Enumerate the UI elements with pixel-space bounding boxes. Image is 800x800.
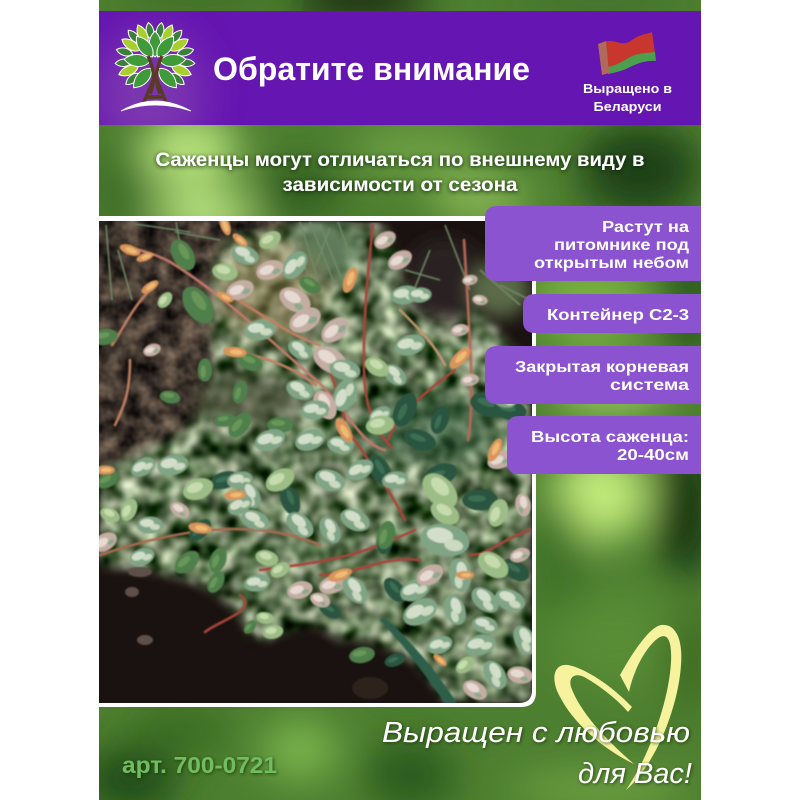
slogan: Выращен с любовью bbox=[382, 717, 690, 749]
info box: container bbox=[523, 294, 701, 333]
dark green leaves bbox=[185, 388, 533, 622]
info box: grown in open field: питомнике под bbox=[554, 237, 689, 254]
logo: tree bbox=[115, 22, 195, 111]
soil and grass masses bbox=[195, 220, 530, 465]
flag caption: Выращено в bbox=[583, 81, 672, 96]
slogan bbox=[382, 717, 692, 790]
subtitle bbox=[156, 150, 644, 196]
info box: closed root system: Закрытая корневая bbox=[515, 359, 689, 376]
subtitle: зависимости от сезона bbox=[282, 175, 518, 196]
info box: height: Высота саженца: bbox=[531, 429, 689, 446]
flag caption: Беларуси bbox=[594, 99, 662, 114]
upper leaves bbox=[91, 228, 528, 455]
icon: Belarus flag bbox=[598, 32, 656, 75]
info box: grown in open field: Растут на bbox=[602, 219, 689, 236]
flag caption bbox=[583, 81, 672, 114]
grass bbox=[106, 222, 530, 305]
foliage texture bbox=[99, 222, 532, 703]
middle and lower leaves bbox=[89, 434, 542, 704]
icon: yellow heart bbox=[554, 625, 681, 790]
photo: barberry shrub bbox=[85, 205, 542, 704]
logo ring of leaves bbox=[115, 22, 195, 92]
subtitle: Саженцы могут отличаться по внешнему виду в bbox=[156, 150, 644, 171]
info box: height bbox=[507, 416, 701, 474]
article number: арт. 700-0721 bbox=[122, 752, 277, 778]
soil specks bbox=[125, 567, 388, 699]
info box: grown in open field: открытым небом bbox=[534, 255, 689, 272]
info box: height: 20-40см bbox=[617, 447, 689, 464]
logo trunk and ground bbox=[143, 56, 167, 104]
title: Обратите внимание bbox=[213, 51, 530, 87]
photo frame bbox=[99, 216, 536, 707]
info box: grown in open field bbox=[485, 206, 701, 281]
page background: blurred green bokeh bbox=[80, 0, 715, 800]
info box: closed root system: система bbox=[610, 377, 689, 394]
stems bbox=[100, 225, 530, 632]
slogan: для Вас! bbox=[578, 758, 692, 790]
purple header banner bbox=[99, 11, 701, 125]
info box: closed root system bbox=[485, 346, 701, 404]
info box: container: Контейнер С2-3 bbox=[547, 307, 689, 324]
orange shoots and blade bbox=[95, 213, 505, 703]
soil texture bbox=[99, 221, 300, 478]
